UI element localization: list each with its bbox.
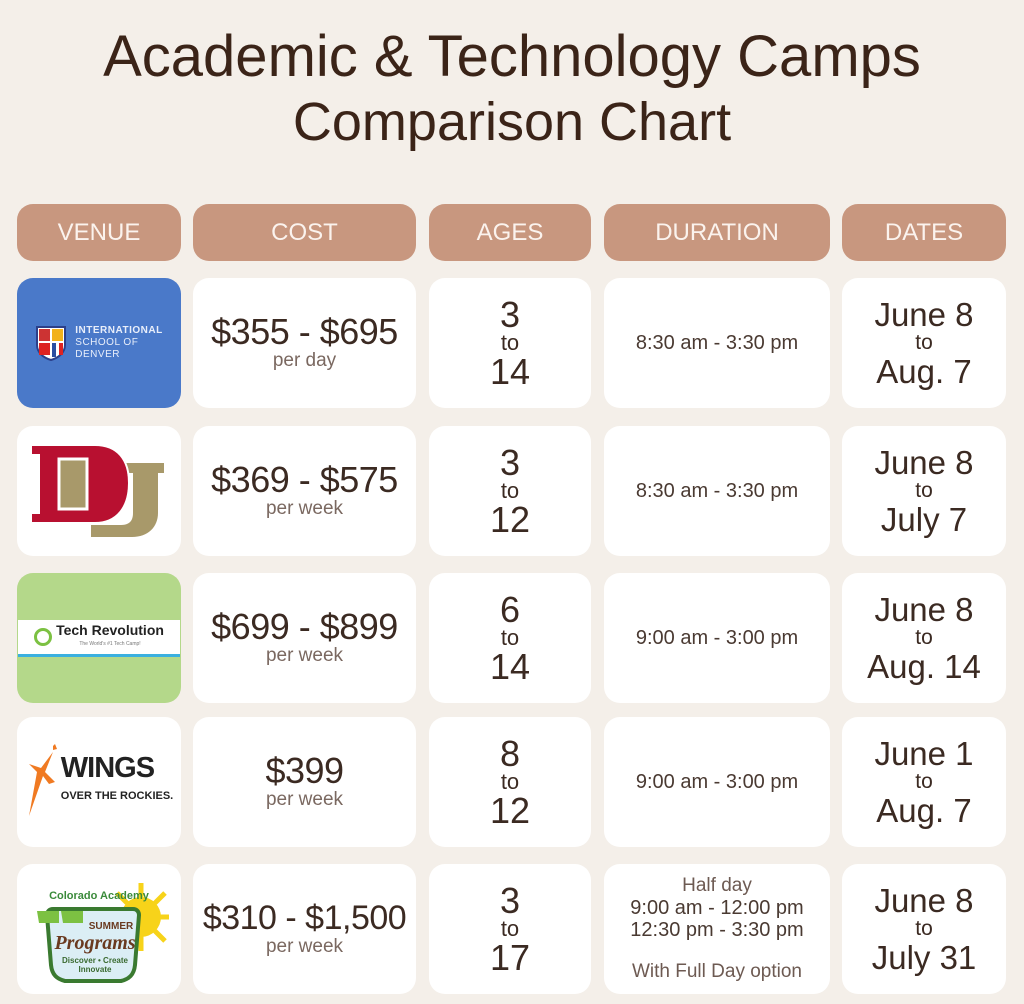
cost 4: $399: [265, 750, 344, 791]
logo: Tech Revolution: Tech Revolution: [56, 622, 164, 638]
duration 5: 12:30 pm - 3:30 pm: [630, 919, 804, 941]
dates 4: June 1: [874, 735, 974, 772]
ages 2: to: [501, 478, 519, 503]
dates 2: June 8: [874, 444, 974, 481]
cost 5: per week: [266, 936, 343, 957]
cost 5: [193, 864, 416, 994]
cost 4: [193, 717, 416, 847]
duration 4: 9:00 am - 3:00 pm: [636, 770, 798, 792]
ages 4: [429, 717, 591, 847]
logo: Colorado Academy Summer Programs: SUMMER: [89, 921, 134, 932]
logo: Wings Over the Rockies: [17, 717, 181, 847]
header: venue: [17, 204, 181, 261]
ages 1: 14: [490, 351, 530, 392]
dates 5: [842, 864, 1006, 994]
ages 4: to: [501, 769, 519, 794]
ages 5: 3: [500, 880, 520, 921]
dates 5: July 31: [872, 939, 976, 976]
dates 1: to: [915, 331, 933, 354]
dates 2: July 7: [881, 501, 967, 538]
header: duration: [604, 204, 830, 261]
ages 5: [429, 864, 591, 994]
duration 3: [604, 573, 830, 703]
cost 3: [193, 573, 416, 703]
ages 3: to: [501, 625, 519, 650]
cost 3: $699 - $899: [211, 606, 398, 647]
ages 3: 6: [500, 589, 520, 630]
ages 1: to: [501, 330, 519, 355]
logo: DU: [17, 426, 181, 556]
logo: Colorado Academy Summer Programs: [17, 864, 181, 994]
dates 3: [842, 573, 1006, 703]
dates 5: June 8: [874, 882, 974, 919]
ages 2: 3: [500, 442, 520, 483]
title: Comparison Chart: [293, 92, 731, 152]
cost 5: $310 - $1,500: [203, 899, 406, 937]
cost 1: $355 - $695: [211, 311, 398, 352]
dates 2: to: [915, 479, 933, 502]
header: dates: [842, 204, 1006, 261]
dates 4: [842, 717, 1006, 847]
logo: Colorado Academy Summer Programs: Programs: [53, 932, 136, 954]
ages 2: [429, 426, 591, 556]
dates 1: June 8: [874, 296, 974, 333]
logo: Tech Revolution: The World's #1 Tech Camp!: [79, 640, 141, 646]
duration 3: 9:00 am - 3:00 pm: [636, 626, 798, 648]
header: ages: AGES: [477, 218, 543, 246]
logo: Colorado Academy Summer Programs: Discover • Create: [62, 956, 129, 965]
cost 2: $369 - $575: [211, 459, 398, 500]
ages 5: 17: [490, 937, 530, 978]
header: duration: DURATION: [655, 218, 779, 246]
duration 4: [604, 717, 830, 847]
cost 2: per week: [266, 498, 343, 519]
duration 5: Half day: [682, 875, 752, 896]
header: venue: VENUE: [58, 218, 140, 246]
cost 1: [193, 278, 416, 408]
dates 1: [842, 278, 1006, 408]
logo: Tech Revolution: [17, 573, 181, 703]
duration 1: 8:30 am - 3:30 pm: [636, 332, 798, 354]
header: dates: DATES: [885, 218, 963, 246]
logo: Wings Over the Rockies: OVER THE ROCKIES.: [61, 790, 173, 802]
ages 4: 8: [500, 733, 520, 774]
duration 5: [604, 864, 830, 994]
title: Academic & Technology Camps: [103, 24, 921, 89]
ages 1: 3: [500, 294, 520, 335]
header: cost: COST: [271, 218, 338, 246]
ages 3: [429, 573, 591, 703]
logo: Wings Over the Rockies: WINGS: [61, 752, 154, 784]
dates 3: June 8: [874, 591, 974, 628]
duration 2: [604, 426, 830, 556]
header: cost: [193, 204, 416, 261]
dates 5: to: [915, 917, 933, 940]
dates 2: [842, 426, 1006, 556]
ages 4: 12: [490, 790, 530, 831]
cost 1: per day: [273, 350, 336, 371]
logo: International School of Denver: INTERNATIONAL: [75, 325, 163, 336]
logo: International School of Denver: [17, 278, 181, 408]
logo: Colorado Academy Summer Programs: Colorado Academy: [49, 890, 150, 902]
ages 5: to: [501, 916, 519, 941]
dates 4: Aug. 7: [876, 792, 972, 829]
dates 3: Aug. 14: [867, 648, 981, 685]
dates 4: to: [915, 770, 933, 793]
duration 1: [604, 278, 830, 408]
cost 3: per week: [266, 645, 343, 666]
logo: International School of Denver: SCHOOL OF: [75, 337, 138, 348]
dates 1: Aug. 7: [876, 353, 972, 390]
dates 3: to: [915, 626, 933, 649]
ages 1: [429, 278, 591, 408]
title: [103, 24, 921, 152]
duration 5: 9:00 am - 12:00 pm: [630, 897, 804, 919]
duration 2: 8:30 am - 3:30 pm: [636, 480, 798, 502]
cost 4: per week: [266, 789, 343, 810]
ages 2: 12: [490, 499, 530, 540]
logo: Colorado Academy Summer Programs: Innovate: [79, 965, 112, 974]
header: ages: [429, 204, 591, 261]
duration 5: With Full Day option: [632, 961, 802, 982]
cost 2: [193, 426, 416, 556]
ages 3: 14: [490, 646, 530, 687]
logo: International School of Denver: DENVER: [75, 349, 120, 360]
